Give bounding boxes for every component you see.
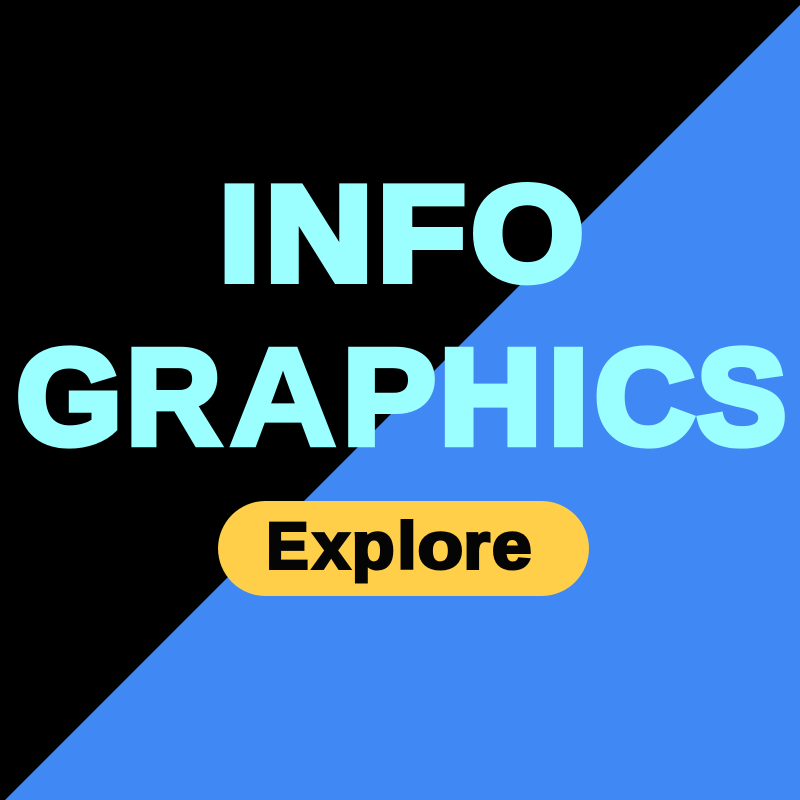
button label: x bbox=[313, 508, 350, 582]
explore button bbox=[218, 501, 589, 596]
title line 2: GRAPHICS: G bbox=[17, 321, 122, 472]
title line 1: INFO: F bbox=[378, 158, 466, 309]
title line 2: GRAPHICS: A bbox=[229, 318, 337, 475]
button pill bbox=[218, 501, 589, 596]
title line 1: INFO: N bbox=[265, 158, 373, 309]
title line 2: GRAPHICS: I bbox=[549, 321, 588, 472]
title line 1: INFO: I bbox=[219, 158, 260, 309]
title line 2: GRAPHICS: P bbox=[342, 321, 437, 474]
title line 2: GRAPHICS: R bbox=[125, 321, 222, 474]
button label: E bbox=[266, 508, 309, 582]
button label: p bbox=[352, 508, 395, 582]
title line 2: GRAPHICS: C bbox=[595, 321, 694, 472]
title line 2: GRAPHICS: H bbox=[440, 321, 541, 472]
button label: l bbox=[397, 508, 417, 582]
button label: r bbox=[463, 508, 490, 582]
title bbox=[17, 158, 786, 475]
button label: o bbox=[418, 508, 463, 582]
title line 2: GRAPHICS: S bbox=[697, 321, 786, 472]
button label: e bbox=[492, 508, 532, 582]
title line 1: INFO: O bbox=[471, 158, 584, 309]
